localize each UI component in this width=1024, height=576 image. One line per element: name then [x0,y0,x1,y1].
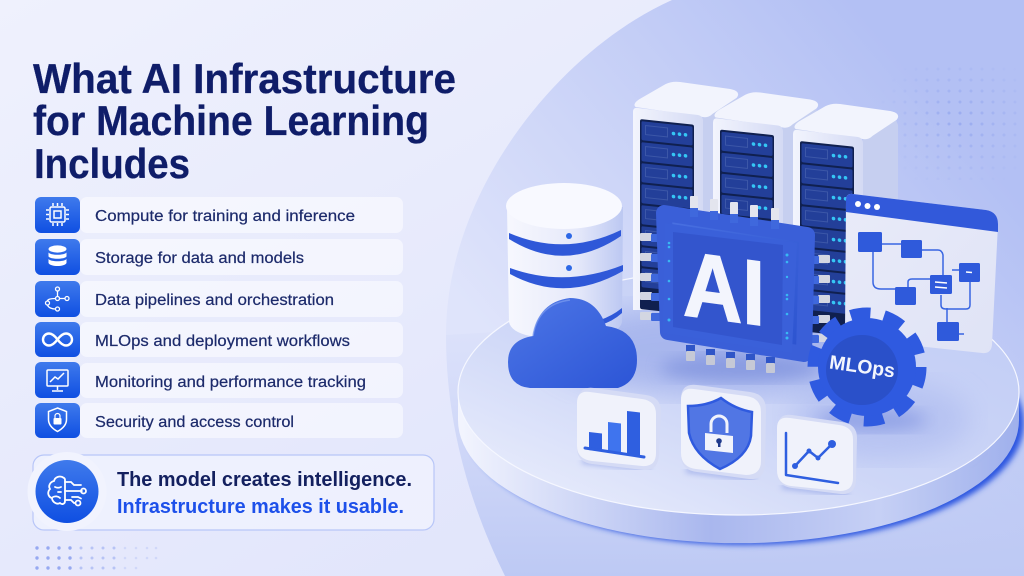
icon: bar chart tile [577,388,661,470]
list: infrastructure components [35,197,403,438]
dot pattern bottom left [35,546,157,570]
title [33,55,456,187]
icon: database cylinder [506,183,623,339]
callout: The model creates intelligence. [117,468,412,491]
title: What AI Infrastructure [33,55,456,102]
icon: AI chip [640,196,830,382]
row: pipelines [35,281,403,317]
icon: line chart tile [777,415,857,494]
icon: shield tile [681,385,766,479]
row: monitoring [35,362,403,398]
dot pattern top right [904,78,1016,170]
panel: workflow window [845,194,998,353]
row: storage: Storage for data and models [95,250,304,267]
title: Includes [34,140,190,187]
icon: server racks [633,83,898,337]
chip pins [640,233,830,373]
row: mlops [35,322,403,357]
row: compute: Compute for training and inference [95,208,355,225]
row: security: Security and access control [95,414,294,431]
icon: MLOps gear [816,316,927,432]
chip label: AI [683,231,765,346]
platform [458,269,1024,545]
row: mlops: MLOps and deployment workflows [95,333,350,350]
row: monitoring: Monitoring and performance tracking [95,374,366,391]
row: security [35,403,403,438]
callout: Infrastructure makes it usable. [117,495,404,518]
row: storage [35,239,403,275]
title: for Machine Learning [33,97,429,144]
row: pipelines: Data pipelines and orchestration [95,292,334,309]
icon: MLOps gear: MLOps [828,352,896,383]
callout [28,452,434,531]
flow connectors [873,244,970,334]
icon: cloud [508,298,637,388]
decorative backdrop arc [446,0,1024,576]
icon: brain [28,452,106,531]
flow nodes [858,232,980,341]
row: compute [35,197,403,233]
